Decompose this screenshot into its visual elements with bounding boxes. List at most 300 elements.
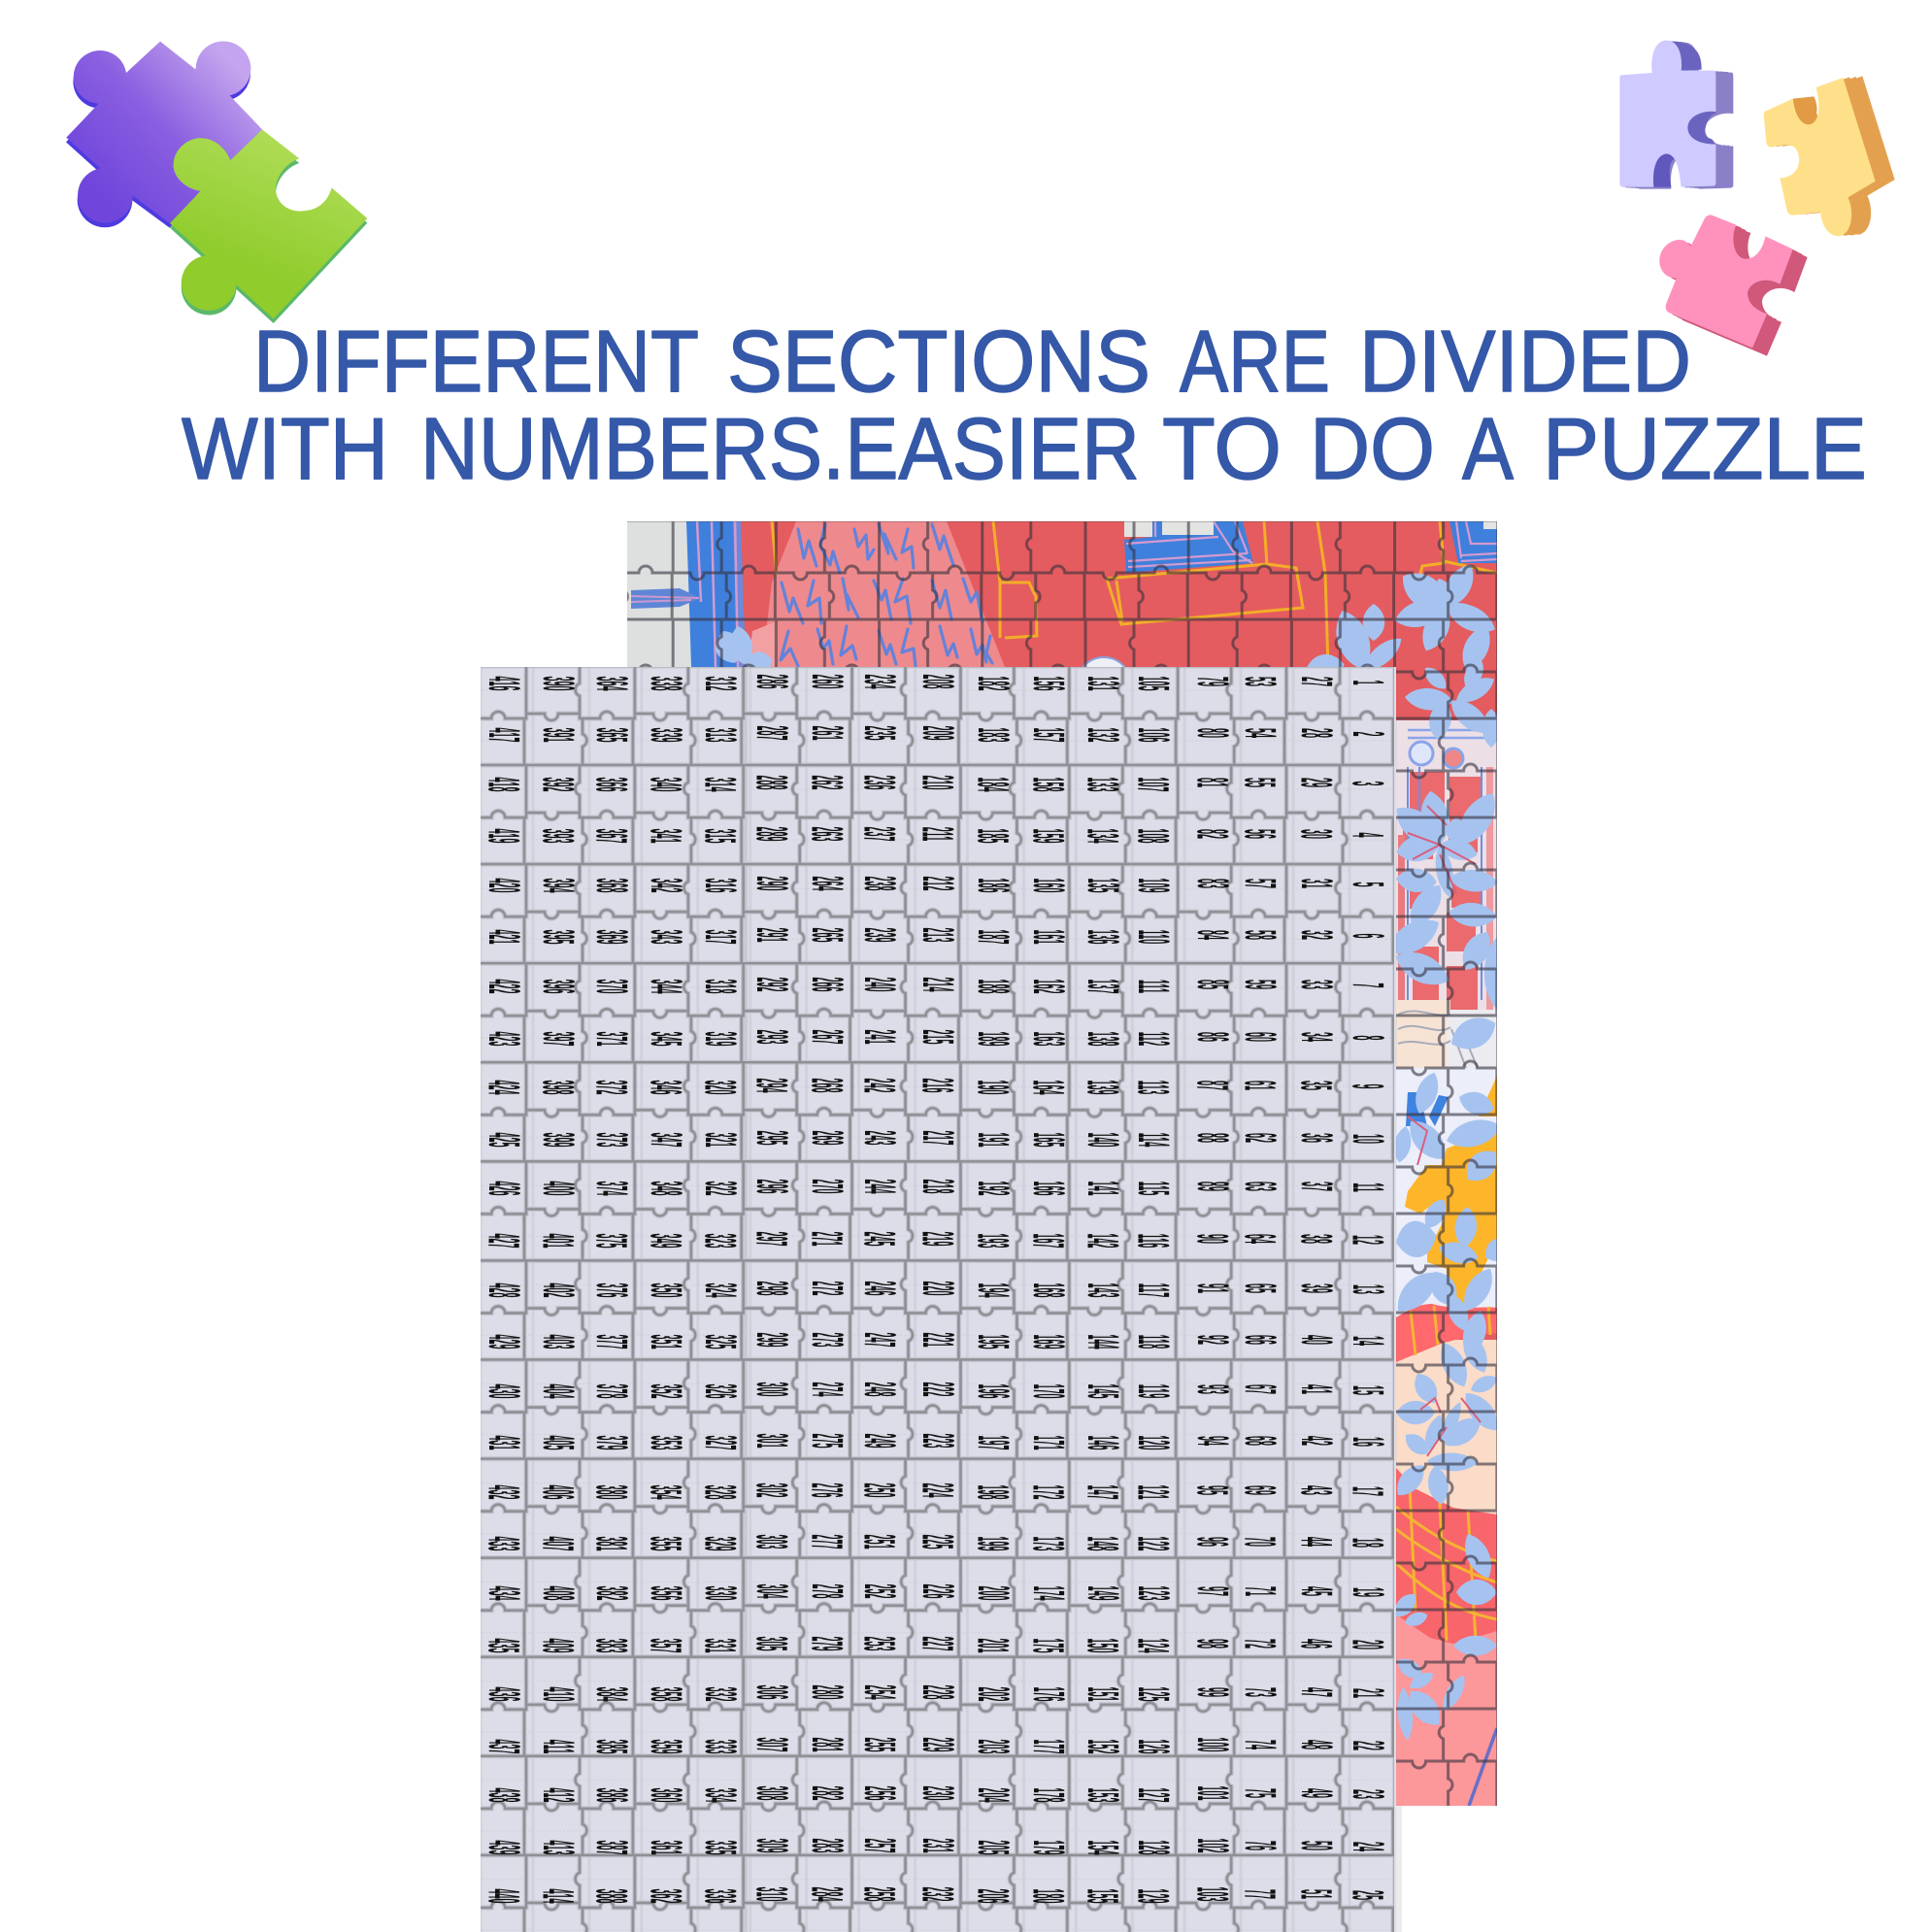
number column 390-414: 399 xyxy=(534,1132,583,1148)
number column 182-206 xyxy=(969,676,1017,1904)
number column 364-388: 384 xyxy=(587,1686,636,1702)
number column 312-336: 328 xyxy=(696,1484,745,1500)
number column 338-362: 359 xyxy=(642,1739,690,1754)
number column 286-310: 307 xyxy=(748,1737,796,1752)
number column 338-362: 342 xyxy=(642,878,690,893)
number column 53-77: 68 xyxy=(1236,1436,1284,1446)
number column 27-51: 45 xyxy=(1292,1586,1341,1596)
number column 416-440: 433 xyxy=(480,1536,528,1551)
number column 53-77: 62 xyxy=(1236,1133,1284,1143)
number column 364-388: 378 xyxy=(587,1383,636,1399)
left wall and blue frame xyxy=(627,521,746,667)
number column 27-51: 48 xyxy=(1292,1740,1341,1749)
number column 208-232: 230 xyxy=(914,1785,962,1801)
title: NUMBERS.EASIER xyxy=(420,401,1140,498)
piece: yellow xyxy=(1764,76,1895,236)
number column 416-440: 432 xyxy=(480,1484,528,1500)
number column 390-414: 396 xyxy=(534,979,583,994)
number column 182-206: 204 xyxy=(969,1787,1017,1803)
number column 364-388: 369 xyxy=(587,929,636,945)
number column 27-51: 30 xyxy=(1292,829,1341,839)
number column 390-414: 405 xyxy=(534,1435,583,1450)
number column 286-310: 287 xyxy=(748,725,796,741)
number column 156-180: 172 xyxy=(1024,1484,1073,1500)
number column 312-336: 334 xyxy=(696,1787,745,1803)
number column 131-155: 135 xyxy=(1079,878,1127,893)
number column 416-440: 436 xyxy=(480,1686,528,1702)
number column 53-77 xyxy=(1236,677,1284,1899)
number column 208-232: 227 xyxy=(914,1636,962,1651)
number column 286-310 xyxy=(748,674,796,1902)
number column 182-206: 192 xyxy=(969,1181,1017,1196)
leaf veins xyxy=(1408,806,1481,1456)
number column 234-258: 244 xyxy=(855,1179,904,1194)
number column 27-51: 44 xyxy=(1292,1537,1341,1547)
number column 27-51: 27 xyxy=(1292,677,1341,686)
number column 208-232: 220 xyxy=(914,1281,962,1296)
number column 79-103: 96 xyxy=(1188,1537,1237,1547)
number column 390-414: 407 xyxy=(534,1536,583,1551)
number column 286-310: 298 xyxy=(748,1281,796,1296)
number column 1-25: 19 xyxy=(1344,1587,1392,1597)
number column 364-388: 381 xyxy=(587,1536,636,1551)
number column 416-440: 427 xyxy=(480,1233,528,1249)
number column 105-129: 113 xyxy=(1129,1081,1178,1094)
number column 286-310: 310 xyxy=(748,1886,796,1902)
number column 260-284: 268 xyxy=(803,1078,851,1093)
title: SECTIONS xyxy=(727,314,1150,411)
number column 156-180: 179 xyxy=(1024,1840,1073,1855)
number column 182-206: 186 xyxy=(969,878,1017,893)
number column 27-51: 28 xyxy=(1292,728,1341,738)
number column 131-155: 137 xyxy=(1079,979,1127,994)
number column 131-155: 144 xyxy=(1079,1334,1127,1349)
number column 312-336: 326 xyxy=(696,1383,745,1399)
number column 156-180: 166 xyxy=(1024,1181,1073,1196)
number column 364-388: 386 xyxy=(587,1787,636,1803)
number column 260-284: 266 xyxy=(803,977,851,992)
number column 364-388: 388 xyxy=(587,1888,636,1904)
number column 286-310: 297 xyxy=(748,1231,796,1247)
number column 390-414: 394 xyxy=(534,878,583,893)
number column 312-336: 329 xyxy=(696,1536,745,1551)
number column 234-258: 249 xyxy=(855,1433,904,1449)
number column 260-284: 280 xyxy=(803,1684,851,1700)
number column 1-25: 4 xyxy=(1344,832,1392,838)
number column 1-25: 23 xyxy=(1344,1789,1392,1799)
number column 364-388: 365 xyxy=(587,727,636,743)
number column 131-155: 131 xyxy=(1079,676,1127,691)
number column 286-310: 308 xyxy=(748,1785,796,1801)
number column 1-25: 13 xyxy=(1344,1284,1392,1294)
number column 208-232: 216 xyxy=(914,1078,962,1093)
number column 131-155: 132 xyxy=(1079,727,1127,743)
number column 234-258: 247 xyxy=(855,1332,904,1348)
number column 208-232: 213 xyxy=(914,927,962,943)
number column 182-206: 197 xyxy=(969,1435,1017,1450)
number column 234-258: 236 xyxy=(855,775,904,790)
number column 390-414: 410 xyxy=(534,1686,583,1702)
number column 131-155: 146 xyxy=(1079,1435,1127,1450)
title: A xyxy=(1462,401,1514,498)
number column 338-362: 345 xyxy=(642,1031,690,1047)
number column 105-129: 121 xyxy=(1129,1484,1178,1500)
number column 1-25: 22 xyxy=(1344,1741,1392,1750)
number column 208-232: 215 xyxy=(914,1029,962,1045)
number column 260-284: 267 xyxy=(803,1029,851,1045)
number column 312-336: 335 xyxy=(696,1840,745,1855)
number column 53-77: 65 xyxy=(1236,1283,1284,1293)
number column 27-51: 47 xyxy=(1292,1687,1341,1697)
number column 286-310: 301 xyxy=(748,1433,796,1449)
number column 1-25: 18 xyxy=(1344,1538,1392,1548)
number column 338-362: 341 xyxy=(642,828,690,844)
number column 338-362: 357 xyxy=(642,1638,690,1653)
number column 182-206: 200 xyxy=(969,1585,1017,1601)
number column 390-414: 391 xyxy=(534,727,583,743)
number column 156-180: 170 xyxy=(1024,1383,1073,1399)
number column 1-25: 6 xyxy=(1344,933,1392,939)
number column 260-284: 263 xyxy=(803,826,851,842)
number column 416-440: 416 xyxy=(480,676,528,691)
number column 131-155: 145 xyxy=(1079,1383,1127,1399)
number column 208-232: 225 xyxy=(914,1534,962,1549)
number column 390-414: 414 xyxy=(534,1888,583,1904)
number column 208-232: 226 xyxy=(914,1583,962,1599)
number column 131-155: 134 xyxy=(1079,828,1127,844)
number column 234-258: 257 xyxy=(855,1838,904,1853)
number column 208-232: 209 xyxy=(914,725,962,741)
number column 27-51: 35 xyxy=(1292,1081,1341,1090)
number column 105-129: 115 xyxy=(1129,1182,1178,1195)
number column 1-25: 20 xyxy=(1344,1640,1392,1649)
number column 182-206: 202 xyxy=(969,1686,1017,1702)
number column 53-77: 57 xyxy=(1236,879,1284,888)
number column 286-310: 289 xyxy=(748,826,796,842)
number column 1-25: 3 xyxy=(1344,781,1392,786)
number column 234-258: 251 xyxy=(855,1534,904,1549)
number column 390-414 xyxy=(534,676,583,1904)
number column 79-103: 97 xyxy=(1188,1586,1237,1596)
number column 53-77: 69 xyxy=(1236,1485,1284,1495)
number column 105-129: 105 xyxy=(1129,676,1178,691)
number column 27-51: 39 xyxy=(1292,1283,1341,1293)
number column 156-180: 164 xyxy=(1024,1080,1073,1095)
number column 416-440: 423 xyxy=(480,1031,528,1047)
number column 364-388: 367 xyxy=(587,828,636,844)
number column 27-51: 29 xyxy=(1292,778,1341,787)
number column 131-155: 154 xyxy=(1079,1840,1127,1855)
number column 260-284: 278 xyxy=(803,1583,851,1599)
number column 234-258: 240 xyxy=(855,977,904,992)
number column 416-440: 430 xyxy=(480,1383,528,1399)
number column 79-103: 79 xyxy=(1188,677,1237,686)
number column 260-284: 262 xyxy=(803,775,851,790)
number column 390-414: 397 xyxy=(534,1031,583,1047)
number column 260-284: 282 xyxy=(803,1785,851,1801)
number column 312-336: 314 xyxy=(696,777,745,792)
number column 53-77: 76 xyxy=(1236,1841,1284,1850)
number column 364-388: 377 xyxy=(587,1334,636,1349)
number column 312-336: 318 xyxy=(696,979,745,994)
number column 364-388: 372 xyxy=(587,1080,636,1095)
number column 208-232: 229 xyxy=(914,1737,962,1752)
number column 79-103: 80 xyxy=(1188,728,1237,738)
number column 416-440: 437 xyxy=(480,1739,528,1754)
title: ARE xyxy=(1180,314,1330,411)
number column 312-336: 317 xyxy=(696,929,745,945)
number column 105-129: 128 xyxy=(1129,1840,1178,1855)
number column 364-388: 374 xyxy=(587,1181,636,1196)
number column 208-232: 211 xyxy=(914,827,962,841)
number column 182-206: 188 xyxy=(969,979,1017,994)
number column 105-129: 119 xyxy=(1129,1384,1178,1398)
number column 79-103 xyxy=(1188,677,1237,1902)
number column 79-103: 86 xyxy=(1188,1032,1237,1042)
number column 131-155: 150 xyxy=(1079,1638,1127,1653)
number column 416-440: 421 xyxy=(480,929,528,945)
number column 1-25: 8 xyxy=(1344,1035,1392,1041)
number column 27-51: 49 xyxy=(1292,1788,1341,1798)
number column 1-25: 25 xyxy=(1344,1890,1392,1900)
number column 364-388: 371 xyxy=(587,1031,636,1047)
title: TO xyxy=(1162,401,1282,498)
number column 286-310: 291 xyxy=(748,927,796,943)
number column 1-25: 7 xyxy=(1344,983,1392,988)
number column 260-284: 273 xyxy=(803,1332,851,1348)
number column 286-310: 304 xyxy=(748,1583,796,1599)
number column 79-103: 99 xyxy=(1188,1687,1237,1697)
number column 208-232: 210 xyxy=(914,775,962,790)
number column 182-206: 190 xyxy=(969,1080,1017,1095)
number column 27-51: 50 xyxy=(1292,1841,1341,1850)
number column 338-362: 343 xyxy=(642,929,690,945)
number column 286-310: 306 xyxy=(748,1684,796,1700)
number column 416-440: 429 xyxy=(480,1334,528,1349)
number column 105-129: 109 xyxy=(1129,878,1178,893)
number column 338-362: 344 xyxy=(642,979,690,994)
number column 390-414: 390 xyxy=(534,676,583,691)
number column 79-103: 82 xyxy=(1188,829,1237,839)
number column 286-310: 296 xyxy=(748,1179,796,1194)
number column 131-155: 155 xyxy=(1079,1888,1127,1904)
number column 416-440: 417 xyxy=(480,727,528,743)
number column 79-103: 85 xyxy=(1188,980,1237,989)
number column 312-336: 320 xyxy=(696,1080,745,1095)
number column 208-232 xyxy=(914,674,962,1902)
number column 416-440: 431 xyxy=(480,1435,528,1450)
number column 260-284: 260 xyxy=(803,674,851,689)
icon: purple and green puzzle pieces xyxy=(66,41,367,323)
number column 338-362: 340 xyxy=(642,777,690,792)
number column 312-336: 321 xyxy=(696,1132,745,1148)
number column 416-440: 419 xyxy=(480,828,528,844)
number column 416-440: 438 xyxy=(480,1787,528,1803)
number column 208-232: 219 xyxy=(914,1231,962,1247)
number column 156-180: 163 xyxy=(1024,1031,1073,1047)
number column 105-129: 107 xyxy=(1129,777,1178,792)
number column 234-258: 255 xyxy=(855,1737,904,1752)
number column 105-129: 110 xyxy=(1129,930,1178,944)
number column 390-414: 406 xyxy=(534,1484,583,1500)
number column 286-310: 288 xyxy=(748,775,796,790)
number column 156-180: 169 xyxy=(1024,1334,1073,1349)
number column 234-258: 235 xyxy=(855,725,904,741)
number column 131-155: 143 xyxy=(1079,1282,1127,1298)
number column 182-206: 201 xyxy=(969,1638,1017,1653)
number column 27-51: 41 xyxy=(1292,1384,1341,1394)
number column 286-310: 294 xyxy=(748,1078,796,1093)
number column 416-440: 420 xyxy=(480,878,528,893)
number column 208-232: 222 xyxy=(914,1382,962,1397)
number column 208-232: 212 xyxy=(914,876,962,891)
number column 234-258: 238 xyxy=(855,876,904,891)
number column 416-440 xyxy=(480,676,528,1904)
number column 416-440: 426 xyxy=(480,1181,528,1196)
number column 156-180: 173 xyxy=(1024,1536,1073,1551)
number column 182-206: 183 xyxy=(969,727,1017,743)
number column 338-362: 348 xyxy=(642,1181,690,1196)
number column 312-336: 331 xyxy=(696,1638,745,1653)
number column 364-388: 370 xyxy=(587,979,636,994)
title xyxy=(182,314,1867,498)
number column 182-206: 196 xyxy=(969,1383,1017,1399)
number column 53-77: 56 xyxy=(1236,829,1284,839)
number column 182-206: 195 xyxy=(969,1334,1017,1349)
number column 234-258: 241 xyxy=(855,1029,904,1045)
number column 260-284: 265 xyxy=(803,927,851,943)
number column 416-440: 422 xyxy=(480,979,528,994)
number column 53-77: 71 xyxy=(1236,1586,1284,1596)
number column 1-25: 2 xyxy=(1344,731,1392,737)
number column 390-414: 402 xyxy=(534,1282,583,1298)
number column 53-77: 59 xyxy=(1236,980,1284,989)
number column 156-180: 165 xyxy=(1024,1132,1073,1148)
number column 53-77: 70 xyxy=(1236,1537,1284,1547)
number column 105-129: 123 xyxy=(1129,1585,1178,1601)
number column 338-362: 353 xyxy=(642,1435,690,1450)
number column 390-414: 395 xyxy=(534,929,583,945)
number column 286-310: 309 xyxy=(748,1838,796,1853)
number column 416-440: 428 xyxy=(480,1282,528,1298)
number column 79-103: 94 xyxy=(1188,1436,1237,1446)
number column 79-103: 91 xyxy=(1188,1283,1237,1293)
number column 312-336: 336 xyxy=(696,1888,745,1904)
number column 208-232: 228 xyxy=(914,1684,962,1700)
number column 79-103: 89 xyxy=(1188,1182,1237,1191)
numbered grey puzzle sheet xyxy=(481,667,1402,1932)
title: DIFFERENT xyxy=(253,314,699,411)
number column 234-258: 254 xyxy=(855,1684,904,1700)
number column 338-362: 361 xyxy=(642,1840,690,1855)
number column 1-25: 15 xyxy=(1344,1385,1392,1395)
number column 105-129: 108 xyxy=(1129,828,1178,844)
number column 234-258: 245 xyxy=(855,1231,904,1247)
number column 390-414: 403 xyxy=(534,1334,583,1349)
number column 312-336: 322 xyxy=(696,1181,745,1196)
number column 338-362 xyxy=(642,676,690,1904)
number column 79-103: 93 xyxy=(1188,1384,1237,1394)
number column 105-129: 120 xyxy=(1129,1435,1178,1450)
number column 364-388: 385 xyxy=(587,1739,636,1754)
number column 286-310: 295 xyxy=(748,1130,796,1146)
number column 1-25: 12 xyxy=(1344,1235,1392,1245)
number column 131-155: 152 xyxy=(1079,1739,1127,1754)
number column 53-77: 66 xyxy=(1236,1335,1284,1345)
number column 338-362: 354 xyxy=(642,1484,690,1500)
number column 27-51: 31 xyxy=(1292,879,1341,888)
number column 234-258: 234 xyxy=(855,674,904,689)
piece: lavender xyxy=(1619,41,1733,189)
number column 1-25 xyxy=(1344,680,1392,1900)
number column 260-284: 283 xyxy=(803,1838,851,1853)
number column 260-284 xyxy=(803,674,851,1902)
number column 312-336: 316 xyxy=(696,878,745,893)
number column 156-180: 168 xyxy=(1024,1282,1073,1298)
number column 156-180: 157 xyxy=(1024,727,1073,743)
number column 260-284: 272 xyxy=(803,1281,851,1296)
number column 53-77: 58 xyxy=(1236,930,1284,940)
number column 312-336: 327 xyxy=(696,1435,745,1450)
number column 27-51: 51 xyxy=(1292,1889,1341,1899)
number column 105-129: 129 xyxy=(1129,1888,1178,1904)
number column 53-77: 74 xyxy=(1236,1740,1284,1749)
number column 53-77: 64 xyxy=(1236,1234,1284,1244)
number column 364-388 xyxy=(587,676,636,1904)
number column 260-284: 269 xyxy=(803,1130,851,1146)
number column 27-51 xyxy=(1292,677,1341,1899)
number column 105-129: 125 xyxy=(1129,1686,1178,1702)
number column 105-129: 114 xyxy=(1129,1133,1178,1147)
number column 156-180 xyxy=(1024,676,1073,1904)
number column 390-414: 401 xyxy=(534,1233,583,1249)
number column 364-388: 366 xyxy=(587,777,636,792)
number column 260-284: 261 xyxy=(803,725,851,741)
number column 27-51: 38 xyxy=(1292,1234,1341,1244)
number column 182-206: 205 xyxy=(969,1840,1017,1855)
title: WITH xyxy=(182,401,388,498)
number column 182-206: 187 xyxy=(969,929,1017,945)
number column 286-310: 293 xyxy=(748,1029,796,1045)
number column 364-388: 368 xyxy=(587,878,636,893)
number column 208-232: 223 xyxy=(914,1433,962,1449)
number column 338-362: 360 xyxy=(642,1787,690,1803)
number column 156-180: 160 xyxy=(1024,878,1073,893)
number column 79-103: 90 xyxy=(1188,1234,1237,1244)
number column 286-310: 305 xyxy=(748,1636,796,1651)
number column 260-284: 264 xyxy=(803,876,851,891)
number column 79-103: 88 xyxy=(1188,1133,1237,1143)
number column 234-258 xyxy=(855,674,904,1902)
piece: pink xyxy=(1659,215,1808,356)
number column 312-336: 332 xyxy=(696,1686,745,1702)
number column 390-414: 409 xyxy=(534,1638,583,1653)
number column 79-103: 102 xyxy=(1188,1838,1237,1853)
number column 156-180: 176 xyxy=(1024,1686,1073,1702)
number column 234-258: 256 xyxy=(855,1785,904,1801)
number column 131-155: 142 xyxy=(1079,1233,1127,1249)
number column 131-155: 136 xyxy=(1079,929,1127,945)
number column 286-310: 292 xyxy=(748,977,796,992)
number column 234-258: 258 xyxy=(855,1886,904,1902)
number column 79-103: 84 xyxy=(1188,930,1237,940)
number column 105-129: 116 xyxy=(1129,1234,1178,1248)
number column 390-414: 404 xyxy=(534,1383,583,1399)
number column 131-155: 133 xyxy=(1079,777,1127,792)
number column 105-129: 112 xyxy=(1129,1032,1178,1046)
number column 208-232: 214 xyxy=(914,977,962,992)
number column 156-180: 158 xyxy=(1024,777,1073,792)
